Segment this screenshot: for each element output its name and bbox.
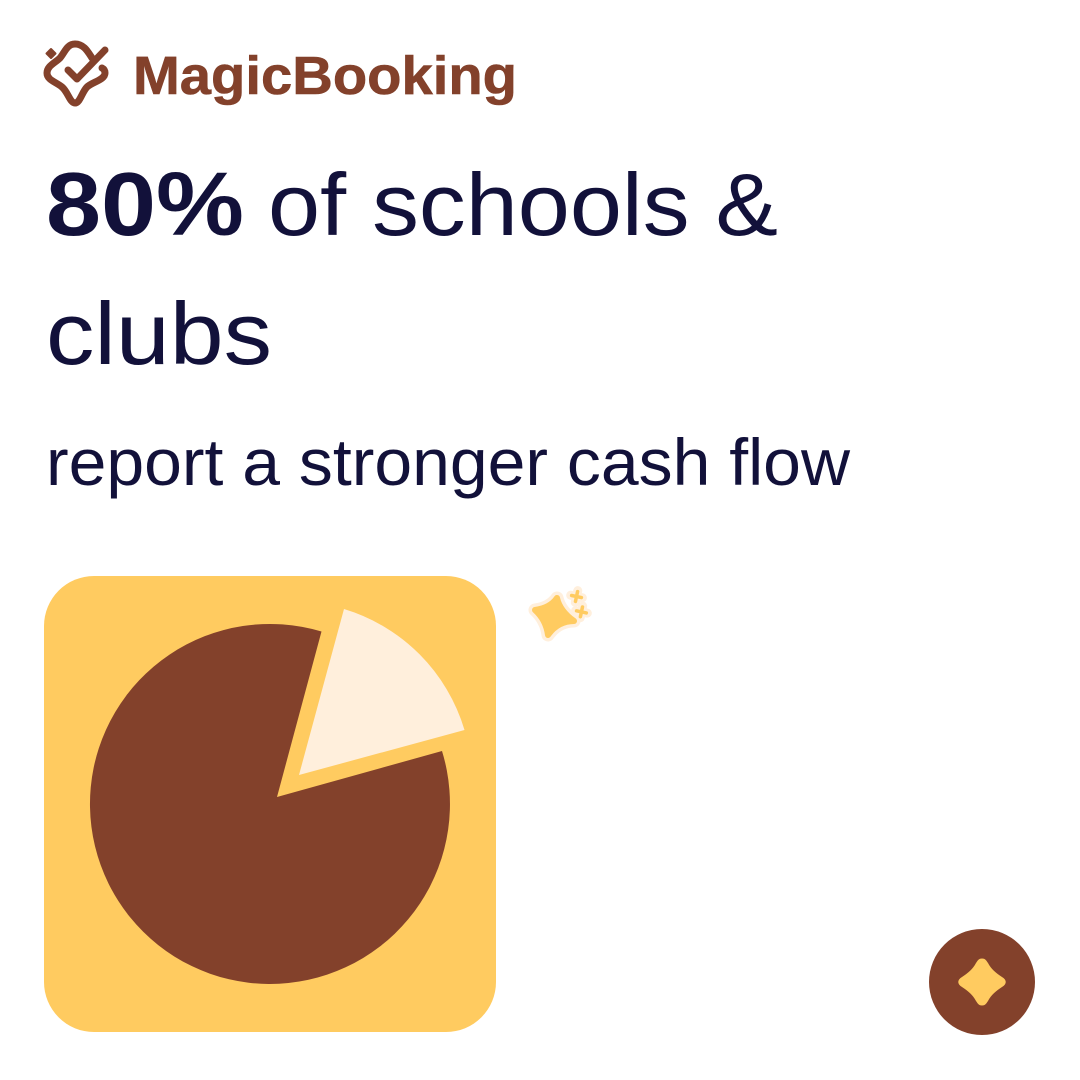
logo: MagicBooking — [46, 44, 517, 106]
subheading: report a stronger cash flow — [46, 425, 850, 499]
logo wordmark: MagicBooking — [133, 46, 517, 106]
icon: sparkles — [535, 589, 591, 635]
heading: line 1: 80% — [46, 155, 244, 255]
icon: brand badge — [929, 929, 1035, 1035]
icon: logo check mark — [46, 44, 105, 103]
pie slice: 80% majority — [90, 624, 450, 984]
panel: pie chart card — [44, 576, 496, 1032]
heading: of schools &: of schools & — [268, 155, 778, 254]
pie slice: 20% remainder — [299, 609, 464, 775]
heading: clubs: clubs — [46, 284, 272, 383]
